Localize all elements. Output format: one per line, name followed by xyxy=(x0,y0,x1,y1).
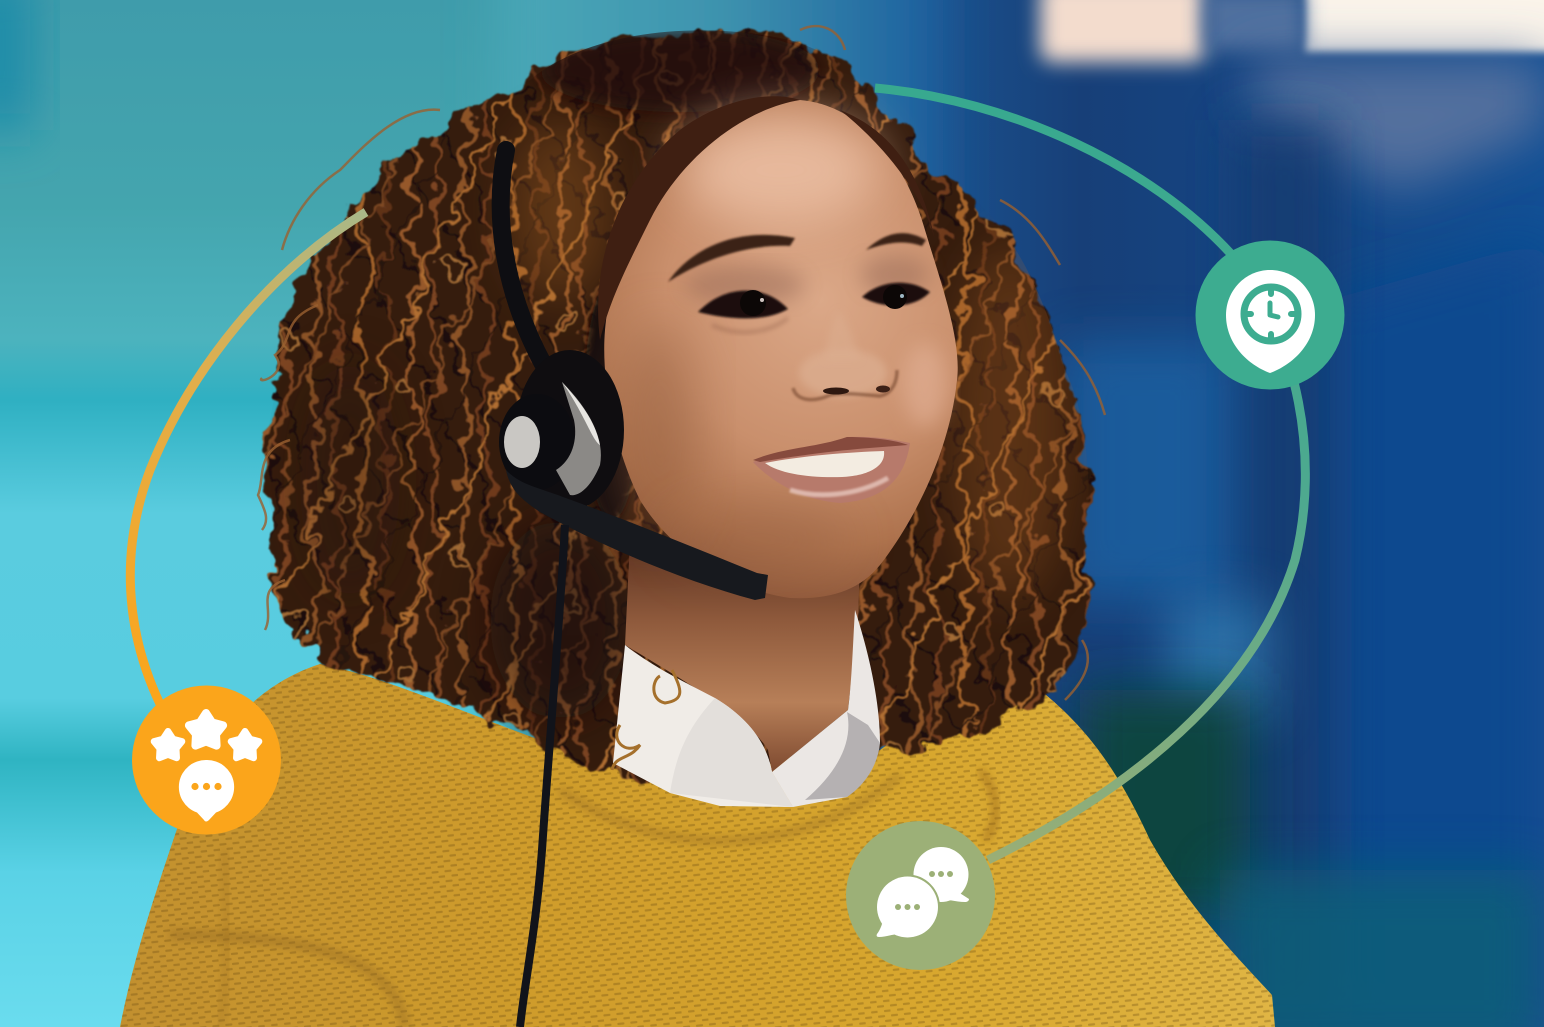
nose xyxy=(799,349,887,397)
headset cable xyxy=(520,525,565,1027)
hair fringe over forehead xyxy=(598,96,800,340)
face xyxy=(584,96,958,598)
hair mass xyxy=(240,10,1110,790)
headset ear cup xyxy=(499,350,624,510)
eyebrows xyxy=(668,235,795,282)
mouth xyxy=(753,437,910,503)
icon: clock location pin xyxy=(1196,240,1344,390)
sweater xyxy=(110,650,1280,1027)
icon: two chat bubbles xyxy=(846,821,995,970)
stray curls over collar xyxy=(612,670,680,770)
eyes xyxy=(698,291,788,318)
flyaway curls xyxy=(258,26,1105,700)
eye sockets xyxy=(685,265,805,305)
blurred lights top right xyxy=(1040,0,1205,62)
neck xyxy=(625,540,860,772)
blurred shelf and panels xyxy=(1250,60,1544,190)
orbit ring: left arc xyxy=(130,212,366,704)
icon: stars rating and speech bubble xyxy=(132,686,281,834)
headset band xyxy=(501,150,552,380)
agent xyxy=(110,10,1280,1027)
headset microphone boom xyxy=(506,470,768,600)
shirt collar xyxy=(613,610,880,807)
orbit ring: right arc xyxy=(875,88,1305,860)
